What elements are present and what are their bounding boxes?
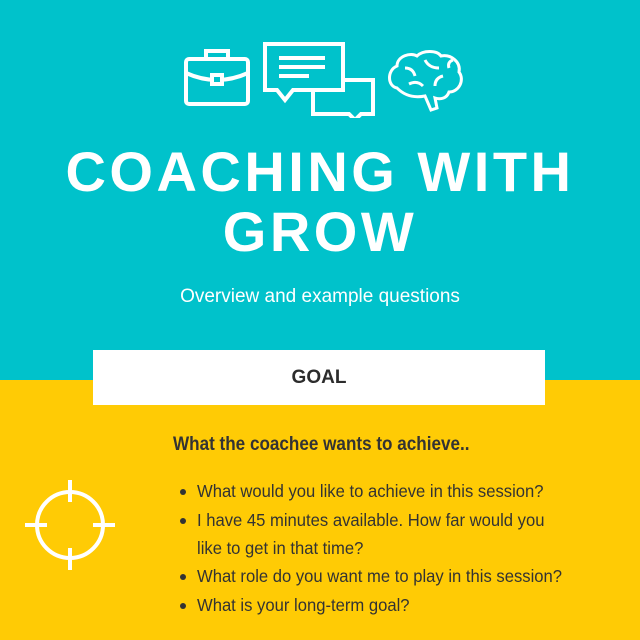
icon: speech bubbles [263,42,375,118]
icon: brain [388,50,463,112]
heading box: GOAL [93,350,545,405]
heading box: GOAL: GOAL [292,367,346,388]
question list [180,481,562,615]
text: What role do you want me to play in this session? [197,566,562,586]
text: I have 45 minutes available. How far would you [197,510,544,530]
title: COACHING WITH [65,140,574,203]
icon: crosshair target [25,480,115,570]
title [65,140,574,263]
subtitle: Overview and example questions [180,286,460,307]
text: like to get in that time? [197,538,363,558]
text: What is your long-term goal? [197,595,410,615]
icon: briefcase [184,49,250,106]
title: GROW [223,200,417,263]
subheading: What the coachee wants to achieve.. [173,434,469,455]
text: What would you like to achieve in this session? [197,481,544,501]
